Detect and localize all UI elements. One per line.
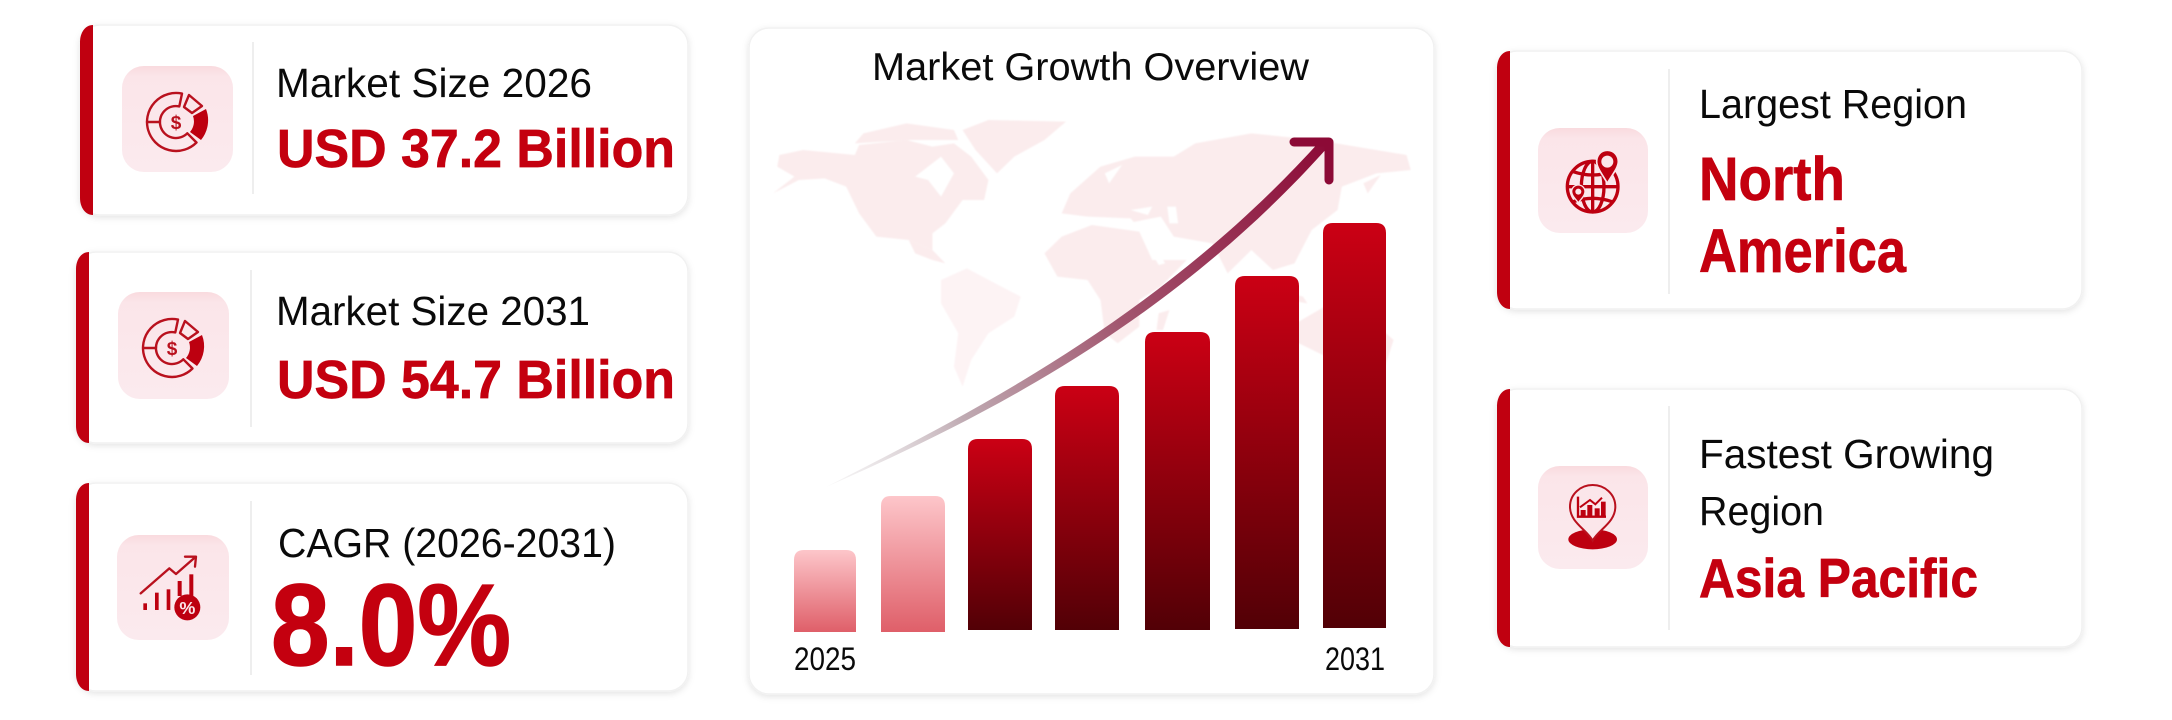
value: North America: America (1699, 217, 1907, 285)
value: USD 37.2 Billion: USD 37.2 Billion (277, 119, 675, 179)
icon: map pin with chart (1538, 466, 1648, 569)
panel: CAGR (76, 483, 688, 691)
label: fastest growing region: Fastest Growing (1699, 431, 1994, 477)
label: fastest growing region: Region (1699, 488, 1824, 534)
panel: market growth overview (749, 28, 1434, 694)
title: Market Growth Overview (872, 46, 1310, 89)
icon: donut chart with dollar: $ (171, 113, 182, 134)
growth arrow (826, 140, 1329, 487)
world map background (773, 120, 1411, 387)
value: USD 54.7 Billion: USD 54.7 Billion (277, 350, 675, 410)
icon: donut chart with dollar (122, 66, 233, 172)
value: North America (1699, 145, 1907, 285)
panel: fastest growing region (1497, 389, 2082, 647)
bar chart (794, 223, 1386, 632)
label: CAGR: CAGR (2026-2031) (278, 520, 616, 566)
icon: donut chart with dollar (118, 292, 229, 399)
value: 8.0%: 8.0% (271, 560, 511, 690)
axis label: 2031: 2031 (1325, 641, 1385, 677)
value: North America: North (1699, 145, 1845, 213)
icon: growth bars with percent badge (117, 535, 229, 640)
label: largest region: Largest Region (1699, 81, 1967, 127)
value: Asia Pacific: Asia Pacific (1699, 547, 1978, 609)
label: market size 2031: Market Size 2031 (276, 288, 590, 334)
axis label: 2025: 2025 (794, 641, 856, 677)
panel: largest region (1497, 51, 2082, 309)
icon: globe with location pins (1538, 128, 1648, 233)
icon: growth bars with percent badge: % (179, 598, 195, 618)
panel: market size 2031 (76, 252, 688, 443)
icon: donut chart with dollar: $ (167, 339, 178, 360)
label: fastest growing region (1699, 431, 1994, 534)
panel: market size 2026 (80, 25, 688, 215)
label: market size 2026: Market Size 2026 (276, 60, 592, 106)
